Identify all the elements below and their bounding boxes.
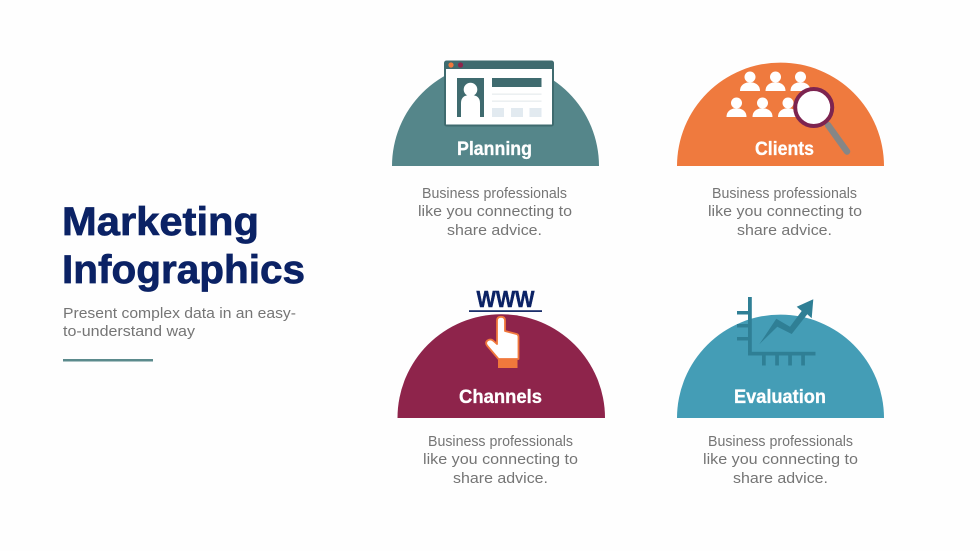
planning description xyxy=(418,185,572,239)
panel: planning xyxy=(392,60,599,239)
icon: www with pointing hand: WWW xyxy=(476,286,535,312)
clients semicircle xyxy=(677,63,884,166)
title: Infographics xyxy=(62,248,305,292)
panel: channels xyxy=(398,286,605,487)
icon: people under magnifier xyxy=(726,72,847,152)
evaluation description xyxy=(703,433,858,487)
title: Marketing xyxy=(62,200,259,244)
evaluation semicircle xyxy=(677,315,884,418)
planning description: like you connecting to xyxy=(418,203,572,220)
subtitle text xyxy=(63,305,296,340)
subtitle text: to-understand way xyxy=(63,323,196,340)
planning description: share advice. xyxy=(447,222,542,239)
channels label: Channels xyxy=(459,386,542,408)
icon: growth chart with arrow xyxy=(737,297,816,366)
evaluation description: share advice. xyxy=(733,470,828,487)
evaluation description: Business professionals xyxy=(708,433,853,450)
channels description xyxy=(423,433,578,487)
channels description: share advice. xyxy=(453,470,548,487)
clients description: Business professionals xyxy=(712,185,857,202)
channels description: like you connecting to xyxy=(423,451,578,468)
clients description: like you connecting to xyxy=(708,203,862,220)
planning label: Planning xyxy=(457,138,532,160)
panel: evaluation xyxy=(677,297,884,487)
evaluation label: Evaluation xyxy=(734,386,826,408)
accent underline xyxy=(63,359,153,362)
icon: www with pointing hand xyxy=(469,286,542,368)
clients label: Clients xyxy=(755,138,814,160)
panel: clients xyxy=(677,63,884,239)
subtitle text: Present complex data in an easy- xyxy=(63,305,296,322)
clients description xyxy=(708,185,862,239)
planning description: Business professionals xyxy=(422,185,567,202)
title xyxy=(62,200,305,292)
planning semicircle xyxy=(392,63,599,166)
channels description: Business professionals xyxy=(428,433,573,450)
icon: profile browser window xyxy=(444,60,554,126)
clients description: share advice. xyxy=(737,222,832,239)
evaluation description: like you connecting to xyxy=(703,451,858,468)
channels semicircle xyxy=(398,314,605,418)
